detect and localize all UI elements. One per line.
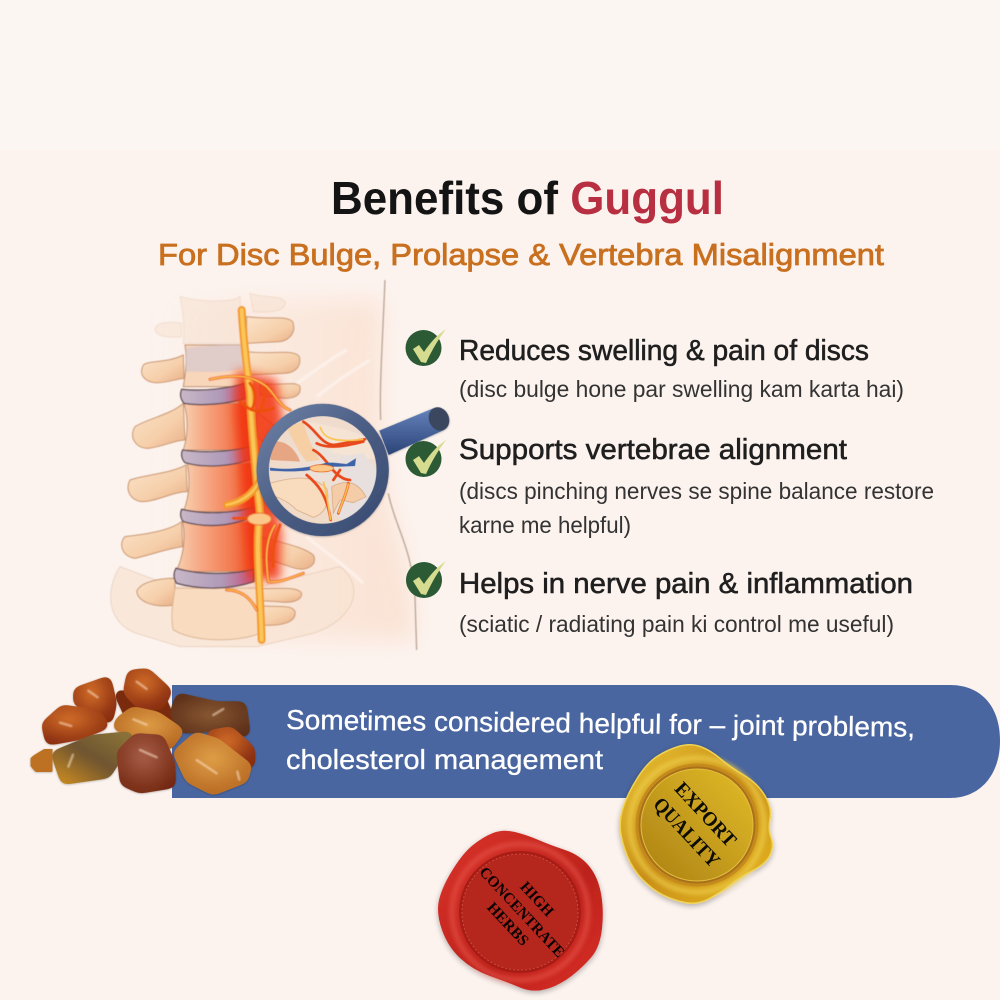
wax seal: high concentrate herbs [438,831,603,991]
icon: magnifying glass [263,404,453,530]
heading: Helps in nerve pain & inflammation [459,568,913,600]
subtitle: For Disc Bulge, Prolapse & Vertebra Misalignment [158,237,884,272]
icon: check [406,440,446,477]
icon: check [406,329,446,366]
seal label [649,778,741,872]
lens ring [263,410,383,530]
body outline [380,280,417,650]
left processes [122,355,187,606]
benefit 1 [406,329,904,402]
pelvis [111,567,354,647]
seal face [637,765,757,885]
discs [174,345,256,588]
note: (disc bulge hone par swelling kam karta hai) [459,376,904,402]
heading: Supports vertebrae alignment [459,434,847,466]
vertebra bodies [176,345,262,572]
note: (discs pinching nerves se spine balance restore [459,478,934,504]
banner text line 2: cholesterol management [286,744,603,775]
seal label: HIGH [516,879,557,920]
benefit 3 [406,561,913,637]
spine illustration [111,280,417,650]
guggul resin pile [33,673,250,790]
nerve ganglion [247,513,271,525]
seal label: HERBS [483,899,532,950]
title: Benefits of Guggul [331,172,724,224]
sacrum [172,588,260,640]
seal label: EXPORT [670,778,741,852]
right processes [247,317,315,625]
icon: check [406,561,446,598]
red inflamed glow [235,370,283,580]
faint fibres [297,350,370,583]
heading: Reduces swelling & pain of discs [459,335,869,367]
nerves [210,310,303,640]
note line 2: karne me helpful) [459,512,631,538]
seal label: QUALITY [649,793,724,872]
wax seal: export quality [620,745,772,903]
note: (sciatic / radiating pain ki control me useful) [459,611,894,637]
seal face [459,851,581,973]
skin background [160,300,415,640]
benefit 2 [406,434,934,538]
banner [172,685,1000,798]
banner text line 1: Sometimes considered helpful for – joint problems, [286,704,915,743]
lens contents [268,415,378,525]
seal label: CONCENTRATE [476,864,568,961]
faded top vertebra [155,293,285,343]
handle [379,404,453,455]
